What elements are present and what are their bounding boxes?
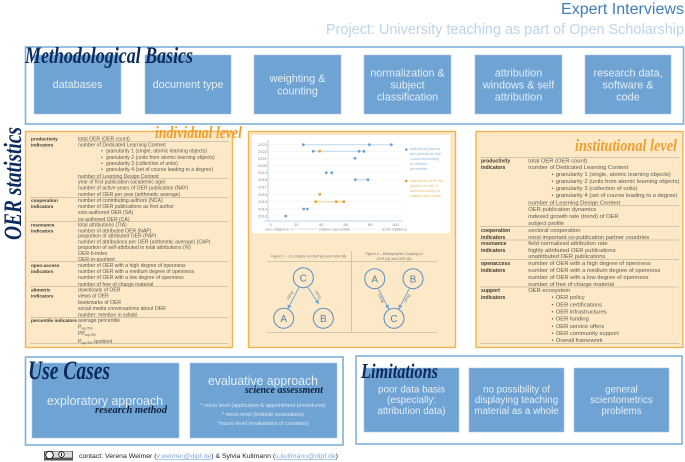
table: individual indicators: downloads of OER bbox=[78, 288, 121, 294]
table: individual indicators: indicators bbox=[31, 269, 54, 274]
table: institutional indicators: • bbox=[552, 331, 554, 337]
figure 1 nodes: citing bbox=[314, 289, 323, 299]
heading: methodological basics: Methodological Basics bbox=[24, 43, 193, 68]
legend: individual papers: individual papers bbox=[410, 146, 440, 151]
heading: use cases: Use Cases bbox=[28, 356, 110, 385]
table: individual indicators: PP bbox=[78, 331, 85, 337]
table: institutional indicators: • bbox=[552, 302, 554, 308]
table: individual indicators: number of active years of OER publication (NAY) bbox=[78, 186, 189, 192]
box: evaluative approach bbox=[190, 363, 337, 438]
table: individual indicators: granularity 4 (set of course leading to a degree) bbox=[106, 167, 213, 173]
box: research data: research data, bbox=[593, 68, 663, 80]
table: individual indicators: proportion of attributed OER (PAP) bbox=[78, 234, 157, 240]
figure 1 nodes: C bbox=[300, 273, 307, 284]
table: individual indicators: total OER (OER count) bbox=[78, 136, 130, 142]
box: attribution windows: attribution bbox=[495, 68, 542, 80]
table: individual indicators: number of OER with a low degree of openness bbox=[78, 275, 184, 281]
table: institutional indicators: field normalized attribution rate bbox=[528, 241, 608, 247]
table: individual indicators: OER-m-quotient bbox=[78, 257, 115, 263]
box: research data: code bbox=[616, 92, 640, 104]
table: individual indicators: P bbox=[78, 324, 81, 330]
table: institutional indicators: Overall framework bbox=[556, 338, 603, 344]
chart: citation percentile dot plot: 2014 bbox=[258, 206, 268, 212]
figure 1 nodes: A bbox=[280, 314, 287, 325]
box: general scientometrics: problems bbox=[601, 406, 642, 417]
table: individual indicators: open-access bbox=[31, 263, 60, 268]
table: institutional indicators: granularity 4 (set of course leading to a degree) bbox=[556, 193, 678, 199]
table: individual indicators: quotient bbox=[93, 339, 113, 345]
table: individual indicators: • bbox=[101, 167, 103, 173]
chart: citation percentile dot plot: 2013 bbox=[258, 214, 268, 218]
table: individual indicators: • bbox=[101, 161, 103, 167]
panel: institutional level bbox=[476, 132, 683, 348]
table: individual indicators: number of free of charge material bbox=[78, 282, 153, 288]
table: institutional indicators: OER policy bbox=[556, 295, 585, 301]
box: attribution windows bbox=[475, 55, 562, 114]
panel: use cases bbox=[26, 357, 343, 445]
figure 1 nodes: B bbox=[320, 314, 327, 325]
chart: citation percentile dot plot: 60 bbox=[344, 222, 349, 227]
box: exploratory approach bbox=[32, 363, 179, 438]
table: individual indicators: number of OER per year (arithmetic average) bbox=[78, 192, 181, 198]
table: institutional indicators: • bbox=[552, 186, 554, 192]
legend: individual papers: to citation bbox=[410, 161, 427, 166]
table: institutional indicators: OER ecosystem bbox=[528, 288, 570, 294]
table: institutional indicators: number of free of charge material bbox=[528, 282, 614, 288]
table: individual indicators: top 5% bbox=[81, 326, 93, 330]
box: general scientometrics: general bbox=[605, 385, 638, 396]
table: individual indicators: number of attributions per OER (arithmetic average) (CAP) bbox=[78, 240, 211, 246]
table: institutional indicators: • bbox=[552, 310, 554, 316]
box: weighting and counting: counting bbox=[277, 86, 318, 98]
table: individual indicators: number of Learning Design Content bbox=[78, 174, 159, 180]
table: individual indicators: percentile indicators bbox=[31, 318, 77, 323]
table: institutional indicators: • bbox=[552, 316, 554, 322]
table: institutional indicators: cooperation bbox=[481, 228, 510, 234]
figure 2 nodes: citing bbox=[377, 293, 386, 304]
chart: citation percentile dot plot: 2018 bbox=[258, 177, 268, 182]
box: poor data basis: (especially: bbox=[387, 395, 436, 406]
table: institutional indicators: unattributed OER publications bbox=[528, 254, 605, 260]
table: individual indicators: top 5% bbox=[81, 341, 93, 345]
table: institutional indicators: • bbox=[552, 324, 554, 330]
table: institutional indicators: indicators bbox=[481, 165, 506, 171]
table: institutional indicators: number of OER with a medium degree of openness bbox=[528, 268, 661, 274]
table: institutional indicators: • bbox=[552, 172, 554, 178]
box: no possibility: displaying teaching bbox=[475, 395, 558, 406]
chart: citation percentile dot plot: 80 bbox=[368, 222, 373, 227]
box: attribution windows: attribution bbox=[495, 92, 542, 104]
box: normalization: classification bbox=[377, 92, 438, 104]
legend: individual papers bbox=[405, 146, 442, 171]
icon: creative commons badge bbox=[44, 451, 73, 460]
box: evaluative approach: * meso level (institute evaluations) bbox=[222, 412, 304, 418]
table: institutional indicators: indicators bbox=[481, 268, 506, 274]
box: poor data basis: poor data basis bbox=[378, 385, 445, 396]
table: institutional indicators: productivity bbox=[481, 158, 510, 164]
table: individual indicators: co-authored OER (CA) bbox=[78, 217, 130, 223]
box: no possibility: no possibility of bbox=[483, 385, 550, 396]
table: individual indicators: granularity 1 (single, atomic learning objects) bbox=[106, 148, 207, 154]
chart: citation percentile dot plot: 100 bbox=[392, 222, 399, 227]
table: individual indicators: productivity bbox=[31, 136, 58, 142]
box: no possibility bbox=[469, 368, 564, 432]
box: poor data basis bbox=[364, 368, 459, 432]
table: institutional indicators: indicators bbox=[481, 235, 506, 241]
table: institutional indicators: OER certifications bbox=[556, 302, 602, 308]
table: individual indicators: year of first publication (academic age) bbox=[78, 180, 166, 186]
table: institutional indicators bbox=[480, 157, 679, 344]
box: exploratory approach: exploratory approach bbox=[47, 393, 163, 408]
box: poor data basis: attribution data) bbox=[377, 406, 446, 417]
table: institutional indicators: OER service offers bbox=[556, 324, 604, 330]
table: individual indicators: OER-h-index bbox=[78, 251, 108, 257]
chart: citation percentile dot plot: 2017 bbox=[258, 184, 268, 190]
table: individual indicators: total attributions (TIA) bbox=[78, 222, 127, 228]
chart: citation percentile dot plot: 2019 bbox=[258, 170, 268, 175]
chart: citation percentile dot plot: 2016 bbox=[258, 192, 268, 197]
contact line: contact: Verena Weimer ( v.weimer@dipf.de ) & Sylvia Kullmann ( s.kullmann@dipf.de ) bbox=[79, 453, 338, 460]
table: institutional indicators: OER publication dynamics bbox=[528, 207, 596, 213]
chart: citation percentile dot plot: 2022 bbox=[258, 149, 268, 154]
table: individual indicators: number: mention in syllabi bbox=[78, 312, 137, 318]
table: individual indicators: indicators bbox=[31, 228, 54, 234]
table: individual indicators: number of contributing authors (NCA) bbox=[78, 198, 163, 204]
table: institutional indicators: total OER (OER count) bbox=[528, 158, 587, 164]
chart: citation percentile dot plot: 40 bbox=[319, 222, 324, 227]
box: attribution windows: windows & self bbox=[482, 80, 555, 92]
chart: citation percentile dot plot: 0 bbox=[270, 222, 272, 227]
box: exploratory approach: research method bbox=[95, 405, 168, 416]
chart: citation percentile dot plot: → most citations bbox=[377, 226, 407, 232]
table: individual indicators: number of Dedicated Learning Content bbox=[78, 142, 166, 148]
box: databases bbox=[34, 55, 121, 114]
heading: limitations: Limitations bbox=[360, 359, 438, 383]
panel: individual level bbox=[26, 123, 242, 348]
table: individual indicators: • bbox=[101, 148, 103, 154]
table: institutional indicators: number of Dedicated Learning Content bbox=[528, 165, 629, 171]
table: institutional indicators: sectoral cooperation bbox=[528, 228, 581, 234]
legend: individual OER: individual OER are bbox=[410, 178, 444, 183]
table: individual indicators: cooperation bbox=[31, 198, 58, 203]
box: general scientometrics bbox=[574, 368, 669, 432]
panel: methodological basics bbox=[26, 47, 684, 124]
diagram: co-citation and bibliographic coupling: Figure 2 – Bibliographic Coupling of bbox=[366, 252, 423, 256]
table: institutional indicators: • bbox=[552, 295, 554, 301]
table: institutional indicators: openaccess bbox=[481, 261, 510, 267]
legend: individual OER: plotted on the x- bbox=[410, 183, 439, 188]
box: research data: software & bbox=[602, 80, 654, 92]
table: institutional indicators: number of OER with a low degree of openness bbox=[528, 275, 649, 281]
chart: citation percentile dot plot: citation percentile bbox=[319, 226, 351, 232]
panel: charts bbox=[248, 132, 456, 348]
table: individual indicators: granularity 3 (collection of units) bbox=[106, 161, 178, 167]
box: normalization: normalization & bbox=[370, 68, 446, 80]
table: individual indicators: altmetric bbox=[31, 288, 51, 292]
figure 2 nodes: A bbox=[371, 274, 378, 285]
table: institutional indicators: support bbox=[481, 288, 500, 294]
figure 2 nodes: B bbox=[410, 274, 417, 285]
table: institutional indicators: granularity 1 (single, atomic learning objects) bbox=[556, 172, 671, 178]
table: institutional indicators: indicators bbox=[481, 295, 506, 301]
box: research data bbox=[585, 55, 671, 114]
figure 2 nodes: citing bbox=[402, 293, 411, 304]
table: individual indicators: resonance bbox=[31, 222, 55, 228]
box: databases: databases bbox=[53, 79, 103, 91]
table: institutional indicators: OER community support bbox=[556, 331, 619, 337]
table: institutional indicators: highly attributed OER publications bbox=[528, 248, 616, 254]
table: individual indicators: solo-authored OER (SA) bbox=[78, 210, 134, 216]
box: evaluative approach: science assessment bbox=[244, 385, 324, 396]
box: normalization bbox=[364, 55, 451, 114]
box: document type: document type bbox=[153, 79, 223, 91]
table: individual indicators: indicators bbox=[31, 294, 54, 298]
table: individual indicators: number of OER with a medium degree of openness bbox=[78, 269, 195, 275]
box: document type bbox=[145, 55, 231, 114]
table: institutional indicators: OER funding bbox=[556, 316, 589, 322]
chart: citation percentile dot plot: 2023 bbox=[258, 142, 268, 147]
table: institutional indicators: • bbox=[552, 193, 554, 199]
table: individual indicators: social media conversations about OER bbox=[78, 306, 166, 312]
table: individual indicators: P bbox=[78, 339, 81, 345]
table: individual indicators: number of OER with a high degree of openness bbox=[78, 263, 186, 269]
table: institutional indicators: resonance bbox=[481, 241, 507, 247]
legend: individual papers: are plotted on the bbox=[410, 151, 442, 156]
table: individual indicators: number of attributed OER (NAP) bbox=[78, 228, 152, 234]
table: institutional indicators: number of Learning Design Content bbox=[528, 200, 621, 206]
legend: individual OER: citation percentile bbox=[410, 193, 442, 198]
figure 2 nodes: C bbox=[390, 314, 398, 325]
table: individual indicators: views of OER bbox=[78, 294, 109, 300]
table: individual indicators bbox=[30, 136, 229, 345]
chart: citation percentile dot plot: 2015 bbox=[258, 199, 268, 204]
table: institutional indicators: • bbox=[552, 179, 554, 185]
legend: individual papers: x-axis according bbox=[410, 156, 439, 161]
diagram: co-citation and bibliographic coupling: Figure 1 – Co-Citation of OER (A) and OER (B) bbox=[271, 254, 346, 258]
diagram: co-citation and bibliographic coupling bbox=[267, 251, 437, 332]
table: individual indicators: bookmarks of OER bbox=[78, 300, 121, 306]
table: individual indicators: • bbox=[101, 155, 103, 161]
figure 1 nodes bbox=[274, 268, 333, 328]
chart: citation percentile dot plot: 20 bbox=[294, 222, 299, 227]
box: evaluative approach: evaluative approach bbox=[208, 373, 318, 388]
legend: individual papers: percentile bbox=[410, 166, 428, 171]
table: individual indicators: top 5% bbox=[85, 333, 97, 337]
table: individual indicators: granularity 2 (units from atomic learning objects) bbox=[106, 155, 215, 161]
table: institutional indicators: indicators bbox=[481, 248, 506, 254]
table: institutional indicators: indexed growth rate (trend) of OER bbox=[528, 214, 619, 220]
chart: citation percentile dot plot bbox=[252, 135, 450, 233]
table: individual indicators: indicators bbox=[31, 204, 54, 209]
table: individual indicators: number of OER publications as first author bbox=[78, 204, 174, 210]
legend: individual OER bbox=[405, 178, 444, 198]
table: institutional indicators: subject profile bbox=[528, 221, 564, 227]
table: individual indicators: proportion of self-attributed in total attributions (%) bbox=[78, 245, 191, 251]
box: normalization: subject bbox=[390, 80, 425, 92]
table: institutional indicators: OER infrastructures bbox=[556, 310, 607, 316]
table: institutional indicators: • bbox=[552, 338, 554, 344]
box: weighting and counting bbox=[254, 55, 341, 114]
table: institutional indicators: granularity 2 (units from atomic learning objects) bbox=[556, 179, 679, 185]
table: individual indicators: average percentile bbox=[78, 318, 120, 324]
heading: OER statistics: OER statistics bbox=[0, 127, 27, 240]
box: evaluative approach: *macro level (evaluations of countries) bbox=[217, 421, 309, 427]
chart: citation percentile dot plot: 2021 bbox=[258, 156, 268, 161]
box: weighting and counting: weighting & bbox=[269, 73, 326, 85]
figure 2 nodes bbox=[365, 269, 423, 328]
title: Expert Interviews bbox=[561, 1, 684, 18]
table: individual indicators: indicators bbox=[31, 142, 54, 148]
figure 1 nodes: citing bbox=[285, 290, 294, 301]
box: general scientometrics: scientometrics bbox=[590, 395, 653, 406]
table: institutional indicators: granularity 3 (collection of units) bbox=[556, 186, 638, 192]
box: evaluative approach: * micro level (application & appointment procedures) bbox=[201, 403, 326, 409]
panel: limitations bbox=[356, 356, 682, 444]
box: no possibility: material as a whole bbox=[474, 406, 559, 417]
table: institutional indicators: number of OER with a high degree of openness bbox=[528, 261, 651, 267]
legend: individual OER: axis according to bbox=[410, 188, 441, 193]
diagram: co-citation and bibliographic coupling: OER (A) and OER (B) bbox=[376, 257, 412, 261]
chart: citation percentile dot plot: 2020 bbox=[258, 163, 268, 168]
chart: citation percentile dot plot: zero citations ← bbox=[265, 226, 294, 232]
table: institutional indicators: most important co-publication partner countries bbox=[528, 235, 649, 241]
heading: individual level: individual level bbox=[155, 123, 242, 142]
